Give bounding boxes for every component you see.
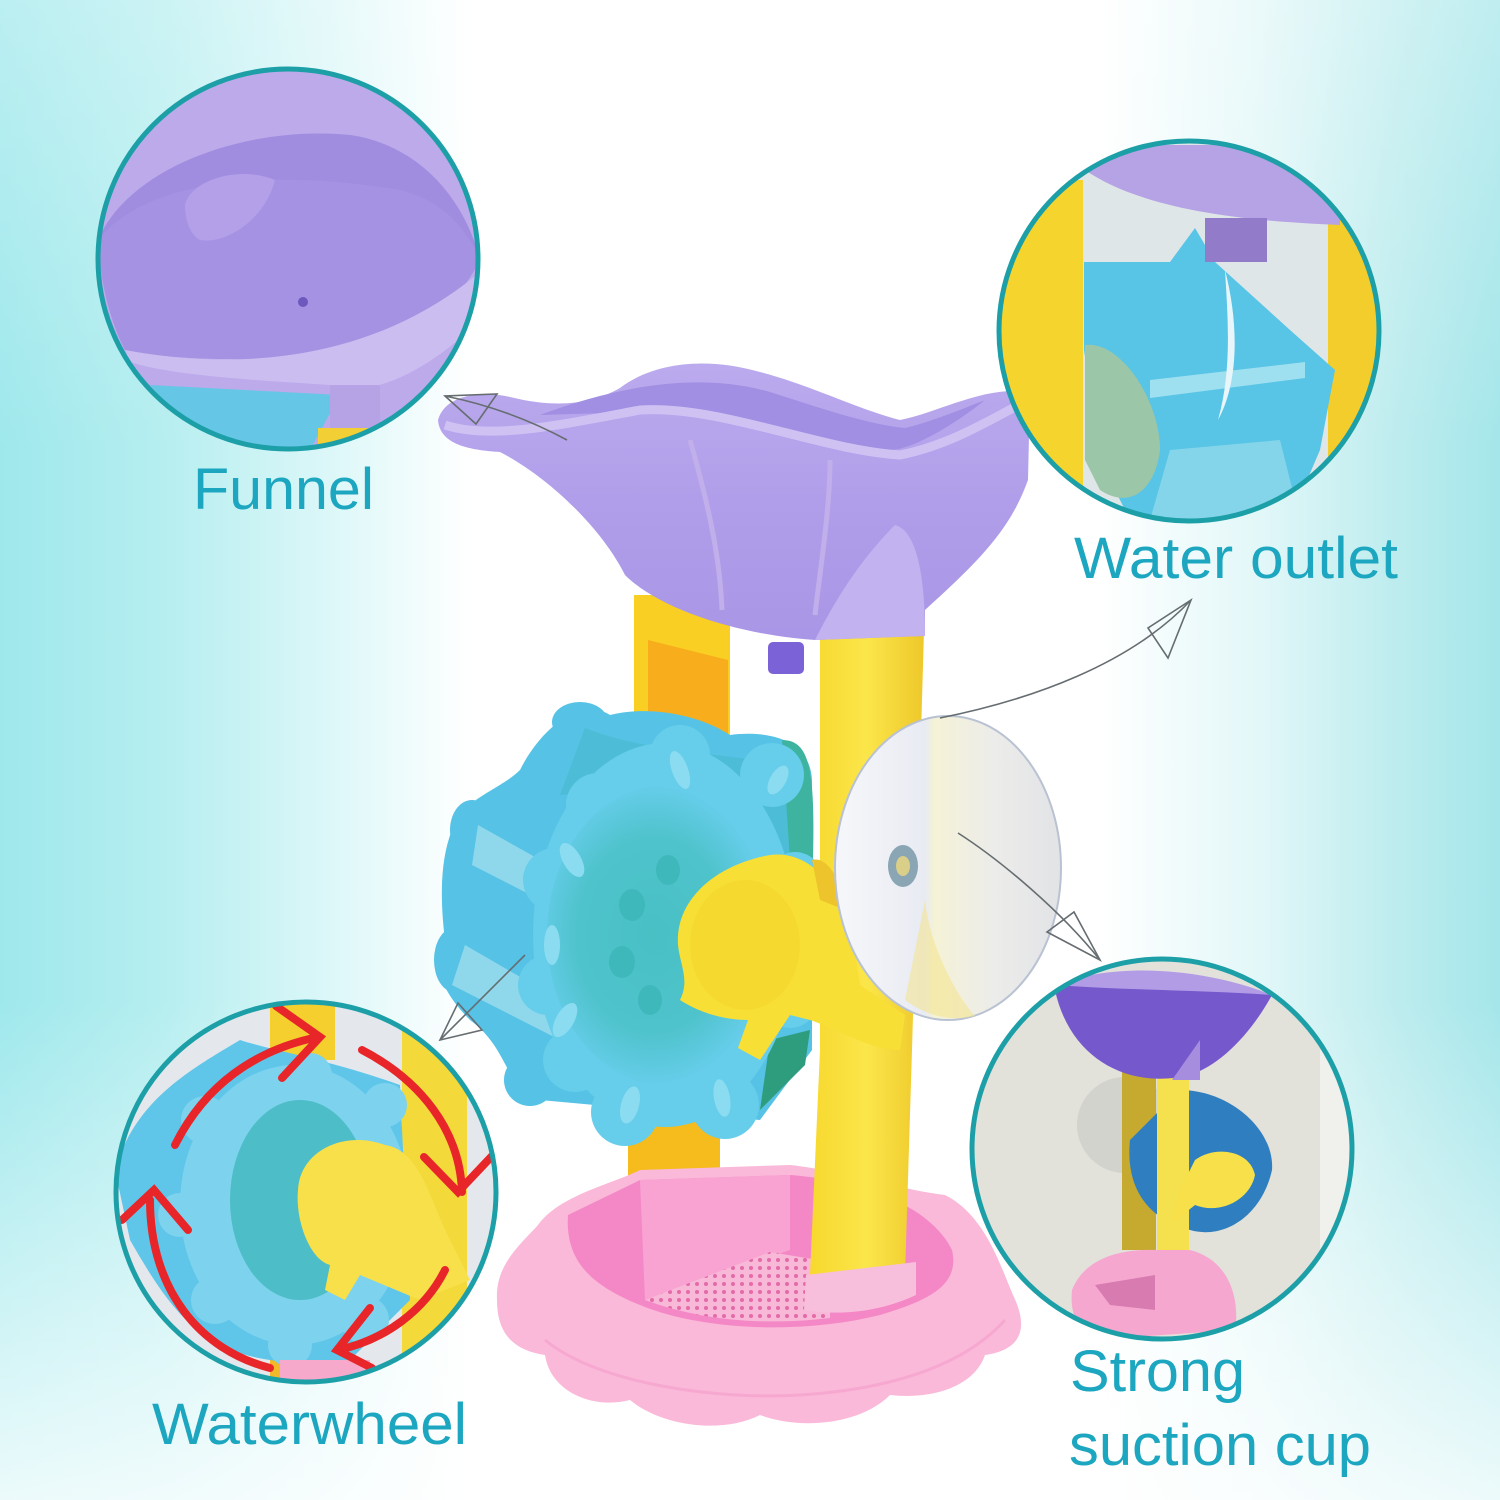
- arrow: waterwheel pointer: [440, 955, 525, 1040]
- suction cup: [835, 716, 1061, 1020]
- pink base: [497, 1165, 1021, 1426]
- front wheel: [518, 725, 823, 1146]
- arrows: rotation: [122, 1006, 492, 1368]
- callout: suction cup: [970, 959, 1370, 1340]
- monkey figure: [678, 854, 905, 1060]
- arrow: funnel pointer: [445, 394, 567, 440]
- arrow: water outlet pointer: [940, 600, 1191, 718]
- label: Strong suction cup: [1069, 1339, 1371, 1478]
- label: Waterwheel: Waterwheel: [152, 1392, 467, 1457]
- funnel: [438, 363, 1030, 640]
- label: Strong suction cup: suction cup: [1069, 1413, 1371, 1478]
- rear wheel: [438, 709, 812, 1120]
- label: Water outlet: Water outlet: [1074, 526, 1398, 591]
- callout: water outlet: [999, 141, 1383, 521]
- water wheel: [434, 702, 823, 1146]
- rear yellow pole: [628, 595, 730, 1190]
- front yellow pole: [810, 630, 924, 1275]
- toy: water wheel and funnel: [434, 363, 1061, 1426]
- pole collar: [804, 1262, 916, 1313]
- arrow: suction cup pointer: [958, 833, 1100, 960]
- spout: [768, 642, 804, 674]
- label: Strong suction cup: Strong: [1070, 1339, 1245, 1404]
- callout: waterwheel: [115, 1000, 496, 1390]
- callout: funnel: [90, 60, 490, 460]
- label: Funnel: Funnel: [193, 457, 374, 522]
